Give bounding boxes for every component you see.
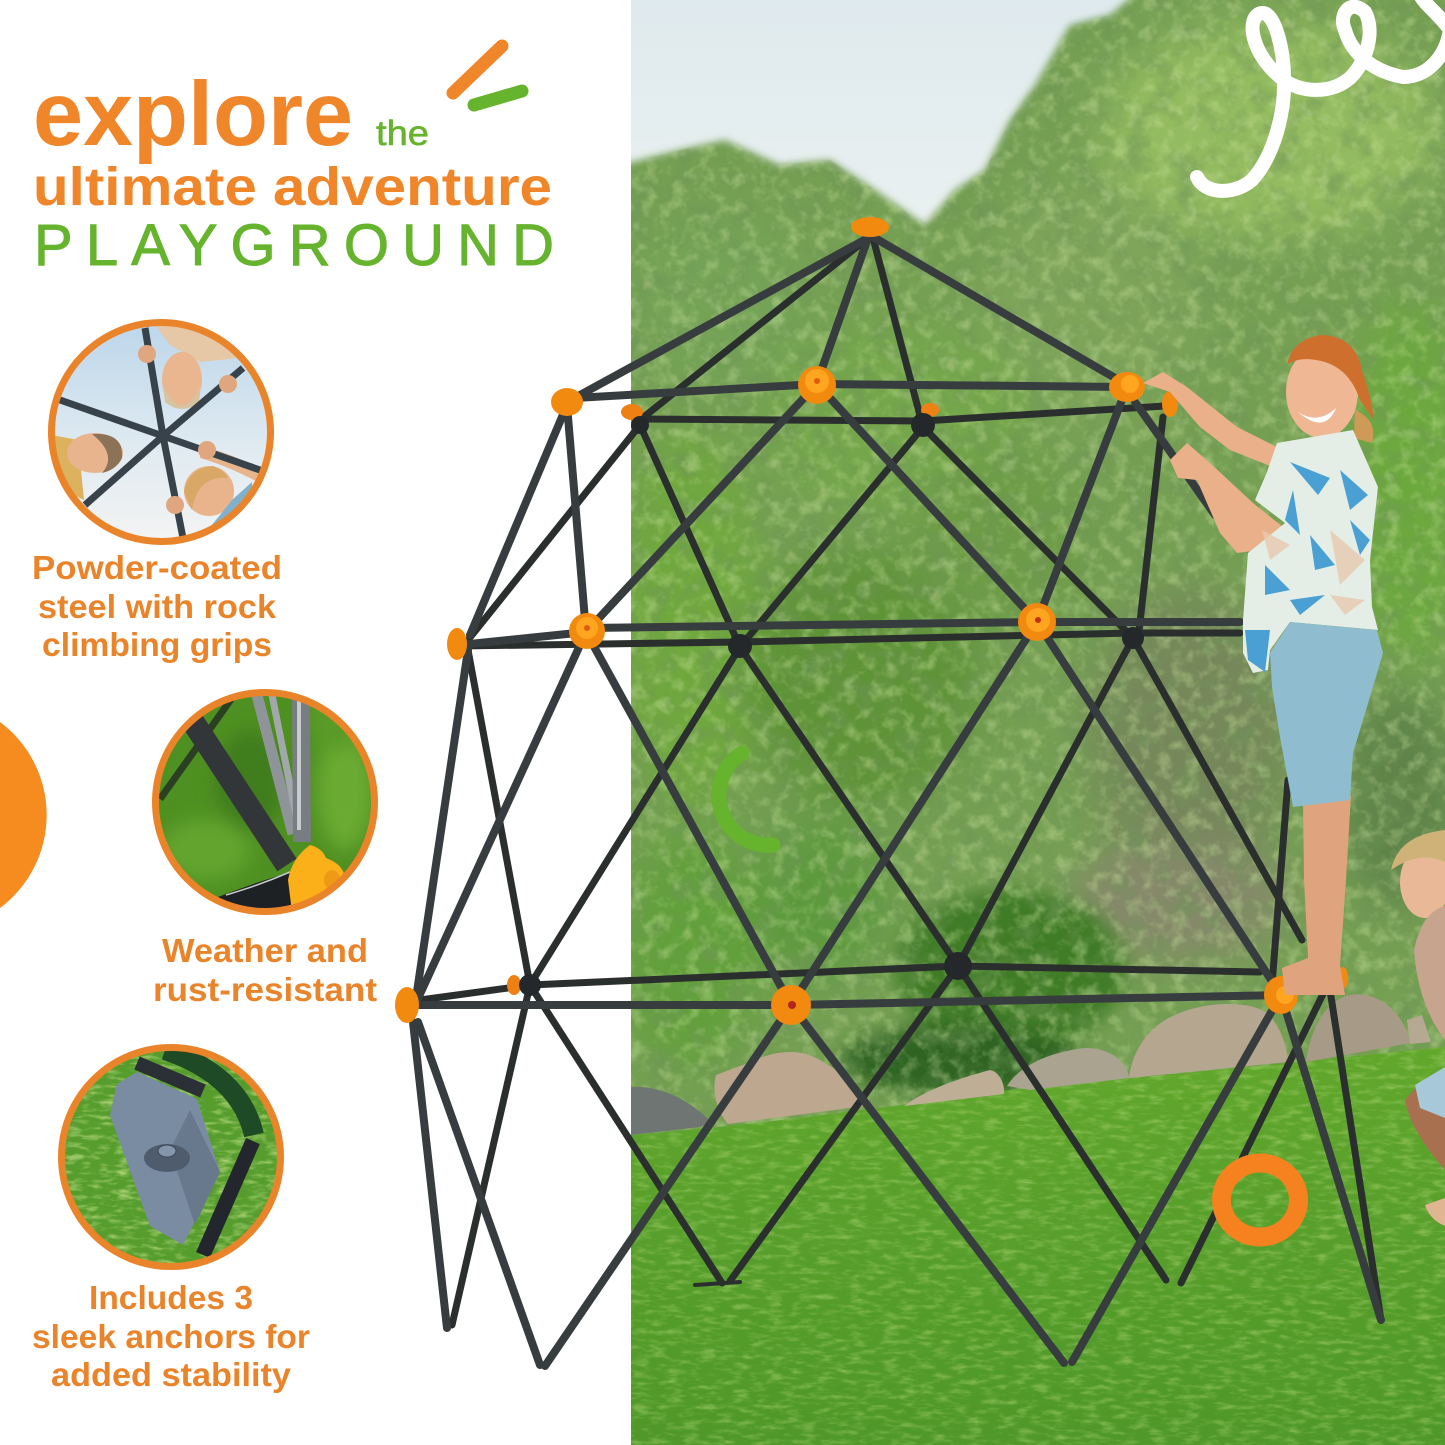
icon: title accent strokes xyxy=(453,46,522,105)
decorative orange half circle xyxy=(0,722,47,908)
back bars xyxy=(420,238,1381,1325)
grass lawn xyxy=(631,1040,1445,1445)
image: kids looking down through climbing dome xyxy=(50,322,272,544)
panel: anchors feature xyxy=(32,1048,310,1393)
arms xyxy=(1143,372,1277,468)
caption: Powder-coated xyxy=(32,549,282,586)
shirt xyxy=(1243,430,1378,673)
climbing dome frame xyxy=(395,217,1381,1366)
caption: sleek anchors for xyxy=(32,1318,310,1355)
decorative green arc xyxy=(719,753,773,845)
decorative orange ring xyxy=(1222,1163,1298,1237)
panel: powder-coated steel feature xyxy=(32,322,282,663)
denim shorts xyxy=(1270,622,1383,807)
caption: steel with rock xyxy=(38,588,277,625)
person: girl at right edge xyxy=(1391,830,1445,1226)
dark back hubs xyxy=(519,413,1144,996)
title: ultimate adventure xyxy=(33,157,552,217)
panel: weather-resistant feature xyxy=(153,690,377,1008)
person: boy climbing in floral shirt xyxy=(1143,335,1383,995)
legs xyxy=(1282,795,1351,995)
panel: outdoor photo background xyxy=(620,0,1445,1445)
title: the xyxy=(376,114,429,153)
caption: Weather and xyxy=(162,932,368,969)
title xyxy=(33,64,554,278)
boulders xyxy=(631,994,1431,1135)
orange connector grips xyxy=(395,217,1348,1025)
caption xyxy=(153,932,377,1008)
caption xyxy=(32,549,282,663)
caption: Includes 3 xyxy=(89,1279,253,1316)
caption: added stability xyxy=(51,1356,292,1393)
front bars xyxy=(413,238,1381,1366)
caption xyxy=(32,1279,310,1393)
head and hair xyxy=(1354,410,1373,443)
panel: white background xyxy=(0,0,631,1445)
image: close-up of bar joint xyxy=(155,690,377,915)
image: ground anchor on grass xyxy=(60,1048,282,1270)
title: PLAYGROUND xyxy=(34,213,554,278)
caption: rust-resistant xyxy=(153,971,377,1008)
caption: climbing grips xyxy=(42,626,272,663)
decorative white squiggle xyxy=(1197,0,1445,191)
title: explore xyxy=(33,64,353,165)
